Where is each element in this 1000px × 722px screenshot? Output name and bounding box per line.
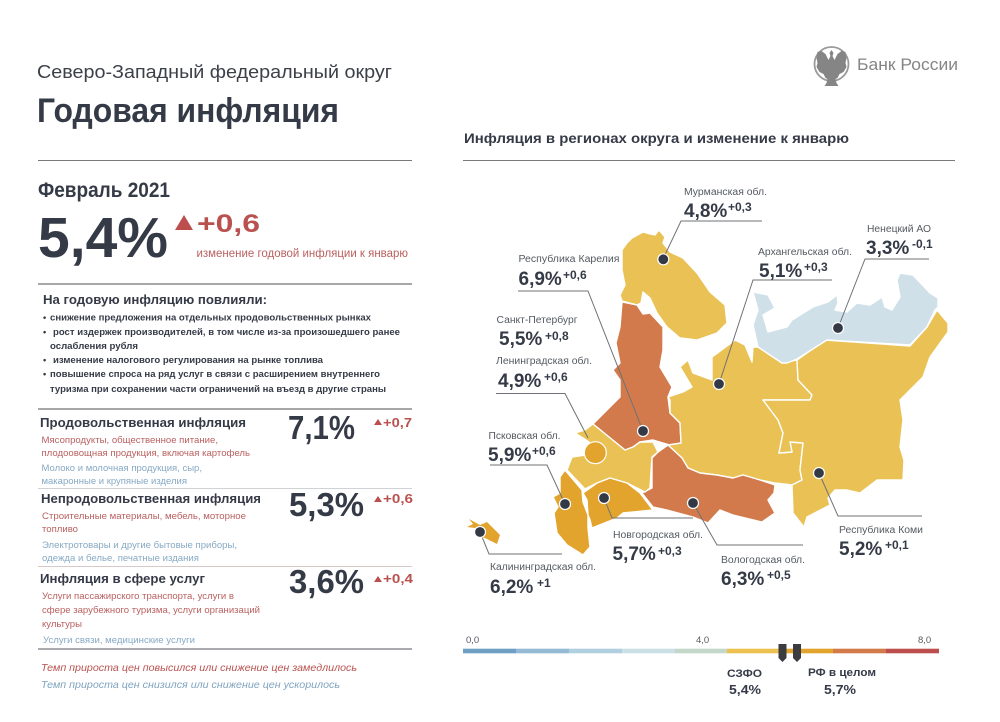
label: Nenets: Ненецкий АО [867,224,931,235]
legend: falling prices note: Темп прироста цен снизился или снижение цен ускорилось [41,679,340,691]
label: Arkhangelsk: 5,1% [759,261,802,282]
panel: food inflation: Мясопродукты, общественное питание, [42,435,218,446]
panel: food inflation: Молоко и молочная продукция, сыр, [42,463,202,474]
text block: factors: снижение предложения на отдельных продовольственных рынках [50,312,372,322]
logo: Bank of Russia: Банк России [857,56,958,74]
logo: Bank of Russia [814,47,958,86]
label: Arkhangelsk: +0,3 [804,260,828,274]
panel: services inflation [40,563,414,646]
label: Komi: 5,2% [839,539,882,560]
label: Komi: Республика Коми [839,524,923,536]
region: Saint Petersburg [584,442,606,464]
text block: factors: изменение налогового регулирования на рынке топлива [53,355,324,365]
panel: non-food inflation: одежда и белье, печатные издания [42,553,199,564]
period heading: Февраль 2021 [38,179,170,202]
headline value: 5,4% [38,206,168,270]
panel: services inflation: сфере зарубежного туризма, услуги организаций [42,605,260,616]
panel: non-food inflation: +0,6 [383,491,413,506]
region: Vologda [642,445,775,523]
text block: factors: • [43,312,46,322]
label: Novgorod: +0,3 [658,544,682,558]
label: Pskov: +0,6 [532,444,556,458]
scale label: Russia: 5,7% [824,682,856,697]
leader lines [480,221,929,554]
label: Pskov: 5,9% [488,445,531,466]
scale label: Russia: РФ в целом [808,667,876,679]
label: Saint Petersburg: Санкт-Петербург [496,314,578,326]
text block: factors [43,292,400,394]
region: Leningrad [567,424,658,492]
panel: non-food inflation: Электротовары и другие бытовые приборы, [42,540,237,551]
text block: factors: повышение спроса на ряд услуг в связи с расширением внутреннего [50,369,380,379]
label: Kaliningrad: 6,2% [490,577,533,598]
panel: services inflation: Услуги пассажирского транспорта, услуги в [42,591,234,602]
panel: non-food inflation: 5,3% [289,486,364,523]
panel: food inflation [40,409,412,487]
label: Leningrad [496,355,592,392]
text block: factors: На годовую инфляцию повлияли: [43,292,267,307]
panel: services inflation: +0,4 [383,571,414,586]
panel: food inflation: 7,1% [288,409,355,446]
region: Nenets [753,273,938,363]
region: Karelia [593,302,681,450]
panel: non-food inflation: Строительные материалы, мебель, моторное [42,511,246,522]
panel: non-food inflation: топливо [42,524,78,535]
label: Leningrad: Ленинградская обл. [496,355,592,367]
label: Nenets: 3,3% [866,238,909,259]
label: Karelia [518,253,620,290]
label: Saint Petersburg [496,314,578,350]
label: Saint Petersburg: +0,8 [545,329,569,343]
text block: factors: туризма при сохранении части ограничений на въезд в другие страны [50,384,386,394]
legend: colour scale [463,635,939,697]
panel: services inflation: Услуги связи, медицинские услуги [43,635,195,646]
region: Kaliningrad [467,519,500,544]
label: Murmansk: 4,8% [684,201,727,222]
label: Komi [839,524,923,560]
text block: factors: • [43,327,46,337]
region: Arkhangelsk [668,340,812,485]
icon: up triangle [175,215,193,230]
map of regions [467,230,948,555]
legend: colour scale: 0,0 [466,635,479,646]
heading: map section: Инфляция в регионах округа и изменение к январю [464,130,849,146]
scale label: district [727,668,762,697]
headline change: +0,6 [197,210,260,238]
panel: food inflation: +0,7 [383,415,412,430]
label: Murmansk: +0,3 [728,200,752,214]
label: Vologda: +0,5 [767,568,791,582]
label: Pskov [488,430,560,466]
scale label: district: 5,4% [729,682,761,697]
label: Karelia: Республика Карелия [518,253,620,265]
label: Leningrad: 4,9% [498,371,541,392]
panel: services inflation: культуры [42,619,82,630]
label: Nenets: -0,1 [912,237,933,251]
region: Murmansk [620,230,727,340]
change caption: изменение годовой инфляции к январю [196,248,408,260]
label: Novgorod: 5,7% [612,544,656,565]
region: Komi [763,310,948,527]
legend: colour scale: 8,0 [918,635,931,646]
legend: rising prices note: Темп прироста цен повысился или снижение цен замедлилось [41,662,357,674]
label: Arkhangelsk [758,246,852,282]
label: Kaliningrad: Калининградская обл. [490,561,596,573]
scale label: Russia [808,667,876,697]
label: Karelia: +0,6 [563,268,587,282]
label: Novgorod: Новгородская обл. [613,529,703,541]
label: Kaliningrad: +1 [537,576,551,590]
panel: non-food inflation [41,486,413,564]
panel: services inflation: 3,6% [289,563,364,600]
panel: non-food inflation: Непродовольственная инфляция [41,491,261,506]
region: Pskov [553,470,590,555]
subtitle: federal district: Северо-Западный федеральный округ [37,61,392,82]
label: Arkhangelsk: Архангельская обл. [758,246,852,258]
panel: food inflation: макаронные и крупяные изделия [42,476,187,487]
label: Vologda: Вологодская обл. [721,554,805,566]
label: Vologda [721,554,805,590]
marker: Russia [793,644,801,662]
label: Kaliningrad [490,561,596,598]
label: Murmansk: Мурманская обл. [684,186,767,198]
panel: headline inflation [38,179,408,270]
label: Pskov: Псковская обл. [488,430,560,442]
label: Nenets [866,224,933,259]
label: Vologda: 6,3% [721,569,764,590]
label: Murmansk [684,186,767,222]
text block: factors: ослабления рубля [50,341,138,351]
label: Karelia: 6,9% [518,269,562,290]
panel: services inflation: Инфляция в сфере услуг [40,571,206,586]
panel: food inflation: плодоовощная продукция, включая картофель [42,448,250,459]
title: Годовая инфляция [37,92,339,130]
label: Komi: +0,1 [885,538,909,552]
label: Saint Petersburg: 5,5% [499,329,542,350]
label: Leningrad: +0,6 [544,370,568,384]
region: Novgorod [583,478,653,528]
legend: colour scale: 4,0 [696,635,709,646]
marker: district [778,644,786,662]
region markers [474,254,844,538]
text block: factors: рост издержек производителей, в том числе из-за произошедшего ранее [53,327,400,337]
text block: factors: • [43,355,46,365]
scale label: district: СЗФО [727,668,762,680]
label: Novgorod [612,529,703,565]
panel: food inflation: Продовольственная инфляция [40,415,246,430]
text block: factors: • [43,369,46,379]
